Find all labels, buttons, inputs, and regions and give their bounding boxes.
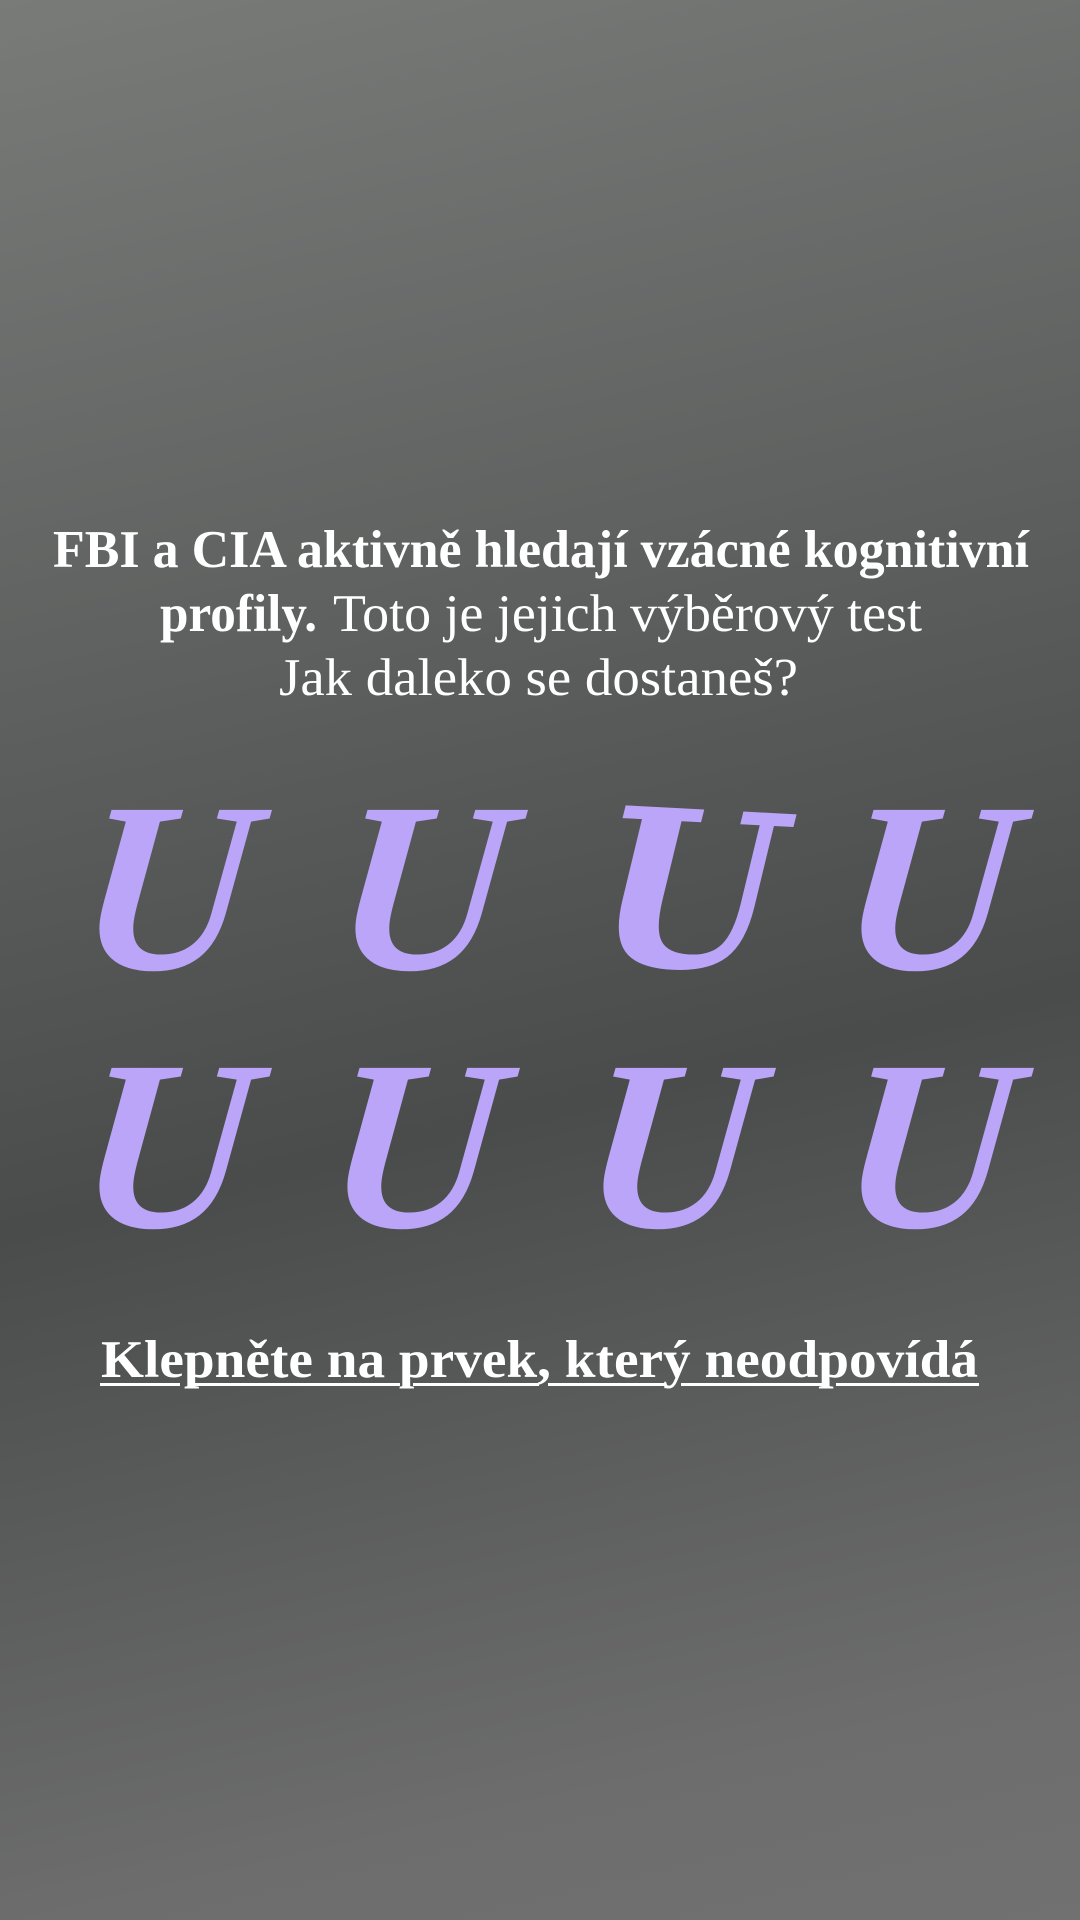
letter U row 2 column 1: U xyxy=(68,1012,279,1281)
letter U row 2 column 4: U xyxy=(830,1012,1041,1281)
heading: question text: FBI a CIA aktivně hledají vzácné kognitivní xyxy=(53,521,1030,579)
letter U row 2 column 2: U xyxy=(316,1012,527,1281)
odd letter U row 1 column 3: U xyxy=(592,759,800,1025)
letter U row 1 column 1: U xyxy=(68,754,279,1023)
letter U row 1 column 4: U xyxy=(830,754,1041,1023)
heading: question text: Toto je jejich výběrový test xyxy=(333,585,922,643)
letter U row 2 column 3: U xyxy=(572,1012,783,1281)
heading: question text xyxy=(53,521,1030,707)
letter U row 1 column 2: U xyxy=(324,754,535,1023)
puzzle grid: letters U xyxy=(68,754,1041,1281)
heading: question text: Jak daleko se dostaneš? xyxy=(279,649,798,707)
heading: question text: profily. xyxy=(160,585,317,643)
call to action: underlined instruction: Klepněte na prvek, který neodpovídá xyxy=(101,1331,978,1389)
